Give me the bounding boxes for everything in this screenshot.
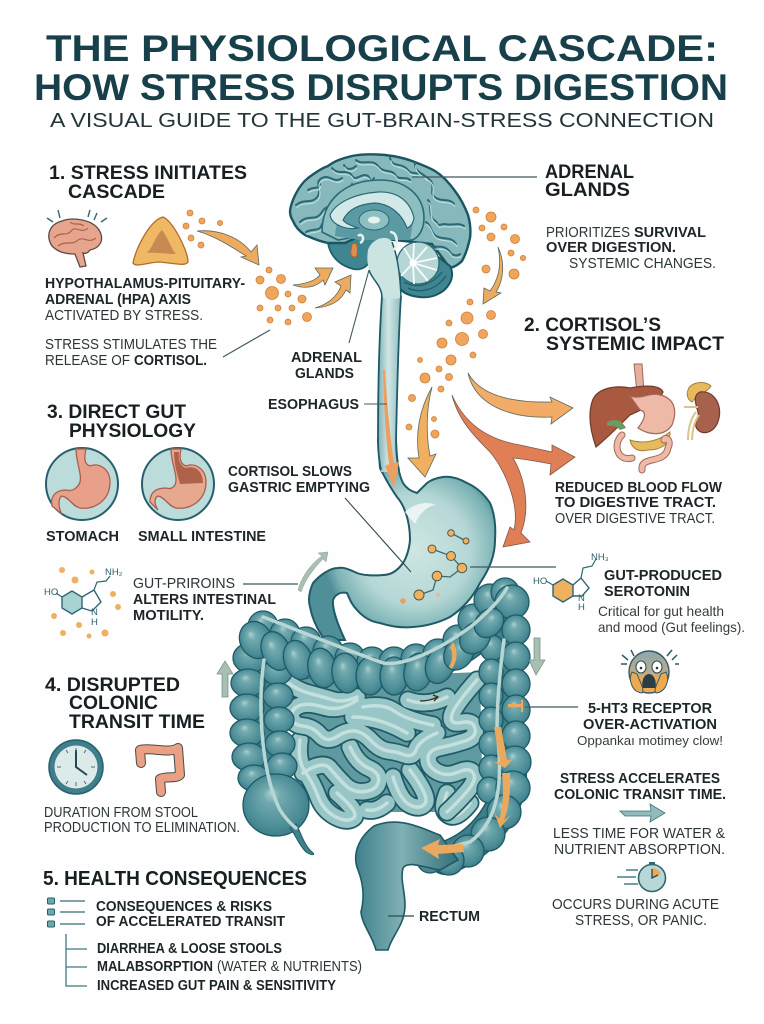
icon: list bbox=[48, 898, 85, 927]
heading 4: COLONIC bbox=[69, 693, 158, 714]
corpus callosum bbox=[330, 192, 414, 228]
text: less time: LESS TIME FOR WATER & bbox=[553, 826, 725, 842]
section 5: health consequences bbox=[43, 868, 362, 994]
label: adrenal glands (centre): ADRENAL bbox=[291, 350, 362, 366]
arrow: to organs bbox=[468, 373, 573, 424]
heading 4 bbox=[45, 675, 205, 733]
thalamus bbox=[359, 210, 389, 230]
heading 3: 3. DIRECT GUT bbox=[47, 402, 186, 423]
text: 5-HT3: OVER-ACTIVATION bbox=[583, 717, 717, 733]
pituitary bbox=[351, 243, 357, 257]
text: cortisol release: STRESS STIMULATES THE bbox=[45, 337, 217, 353]
icon: fast arrow bbox=[620, 804, 665, 822]
title: THE PHYSIOLOGICAL CASCADE: bbox=[46, 28, 718, 69]
small intestine bbox=[287, 672, 482, 820]
cingulate band bbox=[322, 180, 424, 240]
text: duration: DURATION FROM STOOL bbox=[44, 805, 198, 821]
panel: gut-produced serotonin bbox=[470, 552, 745, 635]
cortisol dots: left cluster bbox=[183, 210, 312, 325]
section 1: stress initiates cascade bbox=[45, 163, 270, 369]
arrow: dots to brain upper bbox=[293, 268, 333, 287]
heading: SEROTONIN bbox=[604, 583, 690, 600]
inner brain bbox=[335, 196, 413, 240]
text: reduced blood flow bbox=[555, 480, 722, 527]
text: cortisol release bbox=[45, 337, 217, 369]
arrow: down, grey-green bbox=[529, 638, 545, 675]
text: less time bbox=[553, 826, 725, 858]
leader line: cortisol bbox=[223, 330, 270, 357]
text: occurs during: OCCURS DURING ACUTE bbox=[552, 897, 719, 913]
text: duration bbox=[44, 805, 240, 836]
panel: 5-HT3 receptor bbox=[525, 650, 723, 748]
heading 4: TRANSIT TIME bbox=[69, 712, 205, 733]
transverse colon front row bbox=[233, 602, 510, 695]
brain gyri highlights bbox=[297, 160, 465, 258]
consequence list: MALABSORPTION bbox=[97, 959, 213, 975]
text: cortisol release: CORTISOL. bbox=[134, 353, 207, 369]
icon: serotonin molecule orange: HO bbox=[533, 576, 547, 587]
consequence list bbox=[97, 941, 362, 994]
label: adrenal glands (centre): GLANDS bbox=[295, 366, 354, 382]
consequence list: INCREASED GUT PAIN & SENSITIVITY bbox=[97, 978, 336, 994]
heading bbox=[604, 567, 722, 600]
icon: serotonin molecule orange: H bbox=[578, 602, 585, 613]
section 4: disrupted colonic transit time bbox=[44, 661, 240, 836]
text: 5-HT3: Oppankaı motimey clow! bbox=[577, 733, 723, 748]
appendix bbox=[290, 824, 314, 855]
text: reduced blood flow: OVER DIGESTIVE TRACT. bbox=[555, 511, 715, 527]
panel: stress accelerates transit bbox=[552, 771, 726, 929]
small dark arrow in intestine bbox=[420, 695, 438, 701]
text: gut motility: MOTILITY. bbox=[133, 608, 204, 624]
text: HPA axis bbox=[45, 276, 245, 324]
midbrain bbox=[328, 225, 384, 269]
icon: serotonin molecule with dots: N bbox=[91, 607, 98, 618]
text: priorities: PRIORITIZES bbox=[546, 225, 630, 241]
text: reduced blood flow: TO DIGESTIVE TRACT. bbox=[555, 495, 716, 511]
label: esophagus: ESOPHAGUS bbox=[268, 397, 359, 413]
arrow: down from adrenal bbox=[483, 247, 503, 304]
rectum bbox=[356, 822, 458, 950]
consequence list: (WATER & NUTRIENTS) bbox=[217, 959, 362, 975]
label: cortisol slows gastric emptying bbox=[228, 464, 370, 496]
orange arrow in esophagus bbox=[383, 370, 399, 488]
cerebrum bbox=[290, 154, 470, 268]
panel: adrenal glands (right) bbox=[412, 162, 716, 272]
text: duration: PRODUCTION TO ELIMINATION. bbox=[44, 820, 240, 836]
arrow: to stomach bbox=[408, 387, 436, 477]
brain stem bbox=[367, 238, 401, 299]
icon: stopwatch bbox=[617, 862, 666, 892]
central anatomy illustration bbox=[230, 154, 531, 950]
text: cortisol release: RELEASE OF bbox=[45, 353, 130, 369]
text: consequences and risks: OF ACCELERATED TRANSIT bbox=[96, 914, 285, 930]
text: gut motility: GUT-PRIROINS bbox=[133, 576, 235, 592]
text: consequences and risks bbox=[96, 899, 285, 930]
text: HPA axis: ADRENAL (HPA) AXIS bbox=[45, 292, 191, 308]
cerebellum bbox=[397, 242, 452, 297]
label: rectum: RECTUM bbox=[419, 909, 480, 925]
brain bbox=[290, 154, 470, 299]
text: occurs during: STRESS, OR PANIC. bbox=[575, 913, 707, 929]
leader line bbox=[412, 176, 537, 178]
colon taenia stripes bbox=[261, 588, 507, 850]
heading 2 bbox=[524, 315, 724, 355]
text: critical bbox=[598, 603, 745, 635]
icon: colon bbox=[140, 748, 180, 792]
arrow: motility curved up bbox=[298, 552, 328, 592]
text: critical: Critical for gut health bbox=[598, 603, 724, 619]
text: consequences and risks: CONSEQUENCES & RISKS bbox=[96, 899, 272, 915]
heading 3 bbox=[47, 402, 196, 442]
icon: stressed brain bbox=[47, 210, 107, 267]
heading: GUT-PRODUCED bbox=[604, 567, 722, 584]
subtitle: A VISUAL GUIDE TO THE GUT-BRAIN-STRESS CONNECTION bbox=[50, 110, 714, 132]
text: priorities: SYSTEMIC CHANGES. bbox=[569, 256, 716, 272]
ascending colon and caecum bbox=[230, 643, 309, 836]
colon base band bbox=[262, 610, 510, 858]
cortisol dots: right cluster bbox=[406, 207, 526, 438]
text: priorities: OVER DIGESTION. bbox=[546, 240, 676, 256]
heading 2: 2. CORTISOL’S bbox=[524, 315, 661, 336]
icon: serotonin molecule with dots: NH₂ bbox=[105, 567, 123, 578]
esophagus bbox=[378, 296, 401, 472]
icon: serotonin molecule with dots: HO bbox=[44, 587, 58, 598]
text: gut motility bbox=[133, 576, 298, 624]
text: critical: and mood (Gut feelings). bbox=[598, 619, 745, 635]
tree connector bbox=[66, 934, 87, 986]
text: stress accelerates: STRESS ACCELERATES bbox=[560, 771, 720, 787]
title bbox=[34, 28, 728, 108]
stomach highlight bbox=[405, 503, 436, 524]
icon: screaming face bbox=[621, 650, 679, 693]
label: adrenal glands (centre) bbox=[291, 270, 369, 382]
text: reduced blood flow: REDUCED BLOOD FLOW bbox=[555, 480, 722, 496]
heading 5: 5. HEALTH CONSEQUENCES bbox=[43, 868, 307, 890]
heading: ADRENAL bbox=[545, 162, 634, 183]
text: gut motility: ALTERS INTESTINAL bbox=[133, 592, 276, 608]
brain sulci bbox=[296, 158, 464, 255]
label: cortisol slows gastric emptying: GASTRIC EMPTYING bbox=[228, 480, 370, 496]
arrow: up bbox=[217, 661, 233, 697]
consequence list: DIARRHEA & LOOSE STOOLS bbox=[97, 941, 282, 957]
arrow: gland to dots bbox=[197, 231, 259, 265]
text: occurs during bbox=[552, 897, 719, 929]
heading 1 bbox=[49, 163, 247, 203]
text: 5-HT3: 5-HT3 RECEPTOR bbox=[588, 701, 713, 717]
icon: serotonin molecule orange: NH₃ bbox=[591, 552, 609, 563]
text: HPA axis: ACTIVATED BY STRESS. bbox=[45, 308, 203, 324]
text: priorities: SURVIVAL bbox=[634, 225, 706, 241]
stomach bbox=[309, 440, 495, 640]
label: stomach: STOMACH bbox=[46, 529, 119, 545]
heading 2: SYSTEMIC IMPACT bbox=[546, 334, 724, 355]
stomach molecule bbox=[400, 530, 469, 604]
icon: small intestine circle bbox=[142, 448, 214, 520]
icon: clock bbox=[49, 740, 103, 794]
text: stress accelerates bbox=[554, 771, 726, 803]
descending colon bbox=[417, 585, 531, 875]
arrow: reduced blood flow branches bbox=[452, 395, 575, 547]
icon: serotonin molecule with dots bbox=[44, 567, 123, 638]
text: less time: NUTRIENT ABSORPTION. bbox=[554, 842, 725, 858]
colon back row bbox=[248, 578, 519, 677]
icon: digestive organs bbox=[590, 364, 720, 470]
icon: stomach circle bbox=[46, 448, 118, 520]
leader line bbox=[525, 706, 578, 708]
title: HOW STRESS DISRUPTS DIGESTION bbox=[34, 67, 728, 108]
section 2: cortisol's systemic impact bbox=[524, 315, 724, 527]
icon: adrenal gland bbox=[133, 217, 188, 265]
heading: GLANDS bbox=[545, 180, 630, 201]
leader line: cortisol slows emptying bbox=[345, 498, 411, 572]
heading 4: 4. DISRUPTED bbox=[45, 675, 180, 696]
heading bbox=[545, 162, 634, 201]
leader line bbox=[470, 566, 556, 568]
arrow: dots to brain lower bbox=[315, 275, 351, 308]
section 3: direct gut physiology bbox=[44, 402, 298, 638]
heading 1: CASCADE bbox=[68, 182, 165, 203]
label: small intestine: SMALL INTESTINE bbox=[138, 529, 266, 545]
label: cortisol slows gastric emptying: CORTISOL SLOWS bbox=[228, 464, 352, 480]
text: 5-HT3 bbox=[577, 701, 723, 748]
icon: serotonin molecule orange bbox=[533, 552, 609, 613]
icon: serotonin molecule with dots: H bbox=[91, 617, 98, 628]
label: rectum bbox=[388, 909, 480, 925]
heading 3: PHYSIOLOGY bbox=[69, 421, 196, 442]
colon flow arrows bbox=[421, 642, 523, 859]
text: HPA axis: HYPOTHALAMUS-PITUITARY- bbox=[45, 276, 245, 292]
heading 1: 1. STRESS INITIATES bbox=[49, 163, 247, 184]
text: stress accelerates: COLONIC TRANSIT TIME. bbox=[554, 787, 726, 803]
icon: serotonin molecule orange: N bbox=[578, 593, 585, 604]
text: priorities bbox=[546, 225, 716, 272]
